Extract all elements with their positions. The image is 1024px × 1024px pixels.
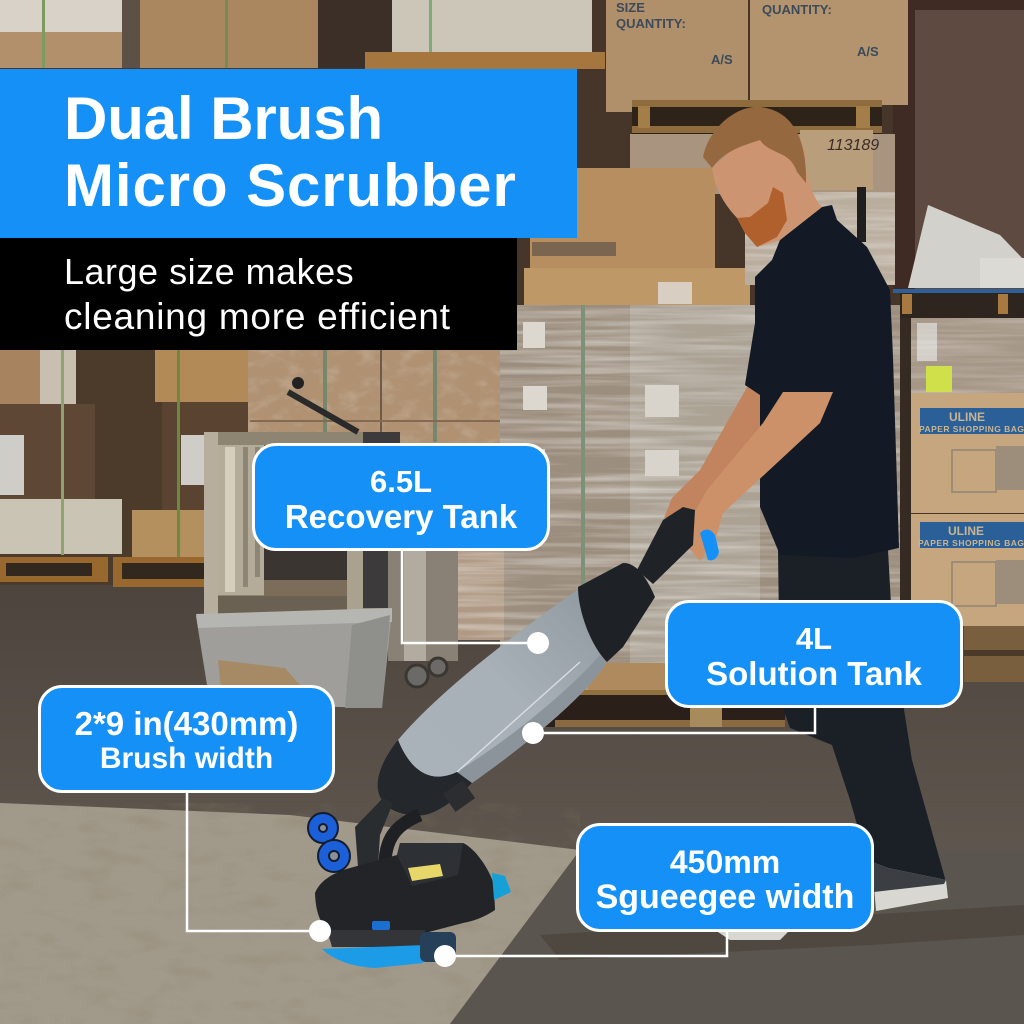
ULINE boxes: PAPER SHOPPING BAG [919, 424, 1024, 434]
callout: solution tank [665, 600, 963, 708]
callout: brush width: Brush width [100, 742, 273, 775]
subtitle banner: cleaning more efficient [64, 296, 451, 337]
connector lines [187, 550, 815, 956]
subtitle banner [0, 238, 517, 350]
callout: brush width: 2*9 in(430mm) [75, 705, 298, 742]
callout: solution tank: Solution Tank [706, 655, 922, 692]
pallet under wrap [545, 690, 785, 727]
title banner: Micro Scrubber [64, 152, 517, 219]
callout: brush width [38, 685, 335, 793]
back wall [0, 0, 1024, 590]
callout: recovery tank [252, 443, 550, 551]
callout: squeegee width [576, 823, 874, 932]
operator far arm [664, 382, 762, 518]
operator torso [745, 205, 899, 558]
operator near arm [680, 392, 833, 561]
top boxes: A/S [711, 52, 733, 67]
top boxes [0, 0, 908, 194]
floor [0, 584, 1024, 1024]
callout: recovery tank: Recovery Tank [285, 498, 517, 535]
top boxes: QUANTITY: [762, 2, 832, 17]
connector dots [309, 632, 549, 967]
top boxes: SIZE [616, 0, 645, 15]
ULINE boxes [911, 393, 1024, 682]
storage bin [196, 608, 392, 708]
callout: squeegee width: 450mm [670, 844, 780, 880]
scrubber handle [637, 507, 719, 584]
steel cabinet [204, 432, 400, 614]
subtitle banner: Large size makes [64, 251, 354, 292]
operator hair [703, 107, 806, 183]
tripod handle behind cabinet [288, 377, 358, 432]
callout: recovery tank: 6.5L [370, 464, 432, 499]
top boxes: A/S [857, 44, 879, 59]
title banner: Dual Brush [64, 85, 383, 152]
ULINE boxes: ULINE [949, 410, 985, 424]
right upper shelf with wrapped stock [893, 0, 1024, 393]
title banner [0, 69, 577, 238]
left stock [0, 350, 250, 587]
ULINE boxes: PAPER SHOPPING BAG [918, 538, 1024, 548]
scrubber base [315, 843, 511, 968]
top boxes: 113189 [827, 137, 879, 154]
operator beard [737, 187, 787, 247]
top boxes: QUANTITY: [616, 16, 686, 31]
operator neck and face [712, 125, 822, 247]
wrapped pallets [248, 305, 911, 690]
ULINE boxes: ULINE [948, 524, 984, 538]
callout: solution tank: 4L [796, 621, 832, 656]
operator trousers and shoes [715, 550, 948, 940]
scrubber bottom cap [378, 740, 472, 815]
scrubber neck and hose [355, 780, 475, 867]
steel tank and roll [388, 551, 504, 687]
scrubber top cap [578, 563, 655, 662]
central boxes [524, 168, 895, 306]
blue wheels [308, 813, 350, 872]
callout: squeegee width: Sgueegee width [596, 878, 854, 916]
scrubber tank [398, 588, 607, 783]
